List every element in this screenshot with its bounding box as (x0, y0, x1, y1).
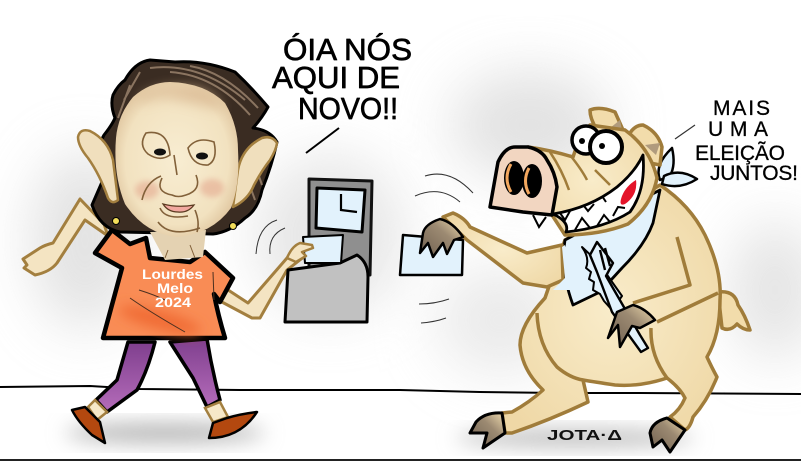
shirt label: Melo (157, 280, 193, 296)
nostrils (504, 161, 524, 195)
thigh lines (537, 313, 667, 380)
machine screen (316, 188, 365, 232)
signature: JOTA·Δ (547, 427, 622, 444)
voting machine (256, 179, 372, 322)
ballot in machine (303, 235, 343, 263)
shoes (72, 407, 105, 443)
machine base (285, 255, 368, 322)
orange shirt (95, 230, 233, 338)
face (115, 82, 238, 237)
body (502, 185, 720, 433)
hair back (92, 60, 277, 234)
socks (88, 400, 107, 420)
ears (78, 130, 118, 202)
bandana knot (658, 148, 697, 186)
speech: pig: ELEIÇÃO (695, 141, 785, 165)
speech: woman: NOVO!! (298, 91, 398, 126)
ballot in pig hand (400, 235, 463, 275)
legs (96, 342, 155, 412)
neck (150, 230, 206, 260)
speech: pig: MAIS (713, 97, 770, 120)
right arm (220, 245, 313, 318)
speech: woman: ÓIA NÓS (283, 32, 412, 67)
speech: pig: JUNTOS! (710, 162, 798, 185)
motion lines: ballot (415, 174, 473, 323)
tail (718, 292, 750, 330)
speech tail: pig (675, 125, 695, 139)
tongue (621, 180, 636, 205)
ground line (0, 386, 801, 394)
napkin (564, 190, 660, 305)
head and jaw (528, 125, 657, 235)
speech: pig: UMA (708, 118, 768, 141)
left hoof (470, 413, 505, 448)
knife (582, 247, 622, 310)
woman character (23, 60, 313, 443)
speech tail: woman (306, 128, 339, 153)
facial features (142, 132, 215, 258)
mouth (553, 155, 643, 232)
fork (590, 242, 648, 352)
lower arm (633, 237, 718, 322)
eyes (154, 148, 166, 156)
screen symbol (341, 194, 357, 212)
machine back panel (309, 179, 372, 275)
speech: pig (695, 97, 798, 185)
right hoof (650, 418, 685, 452)
ears (590, 108, 623, 136)
snout wrinkles (550, 152, 610, 190)
snout (490, 147, 557, 215)
eyes (572, 126, 600, 154)
raised arm (443, 213, 563, 287)
speech: woman (272, 32, 412, 126)
mouth (163, 204, 194, 212)
motion lines: machine (256, 220, 285, 254)
lower hoof (608, 305, 655, 347)
shirt label: 2024 (155, 294, 191, 310)
speech: woman: AQUI DE (272, 60, 400, 95)
raised hoof (420, 219, 463, 257)
shirt label: Lourdes (142, 266, 203, 282)
pig character (420, 108, 750, 452)
left arm (23, 199, 108, 275)
woman hand (287, 243, 313, 262)
shirt label (142, 266, 203, 310)
teeth (533, 196, 625, 230)
earrings (112, 218, 120, 224)
